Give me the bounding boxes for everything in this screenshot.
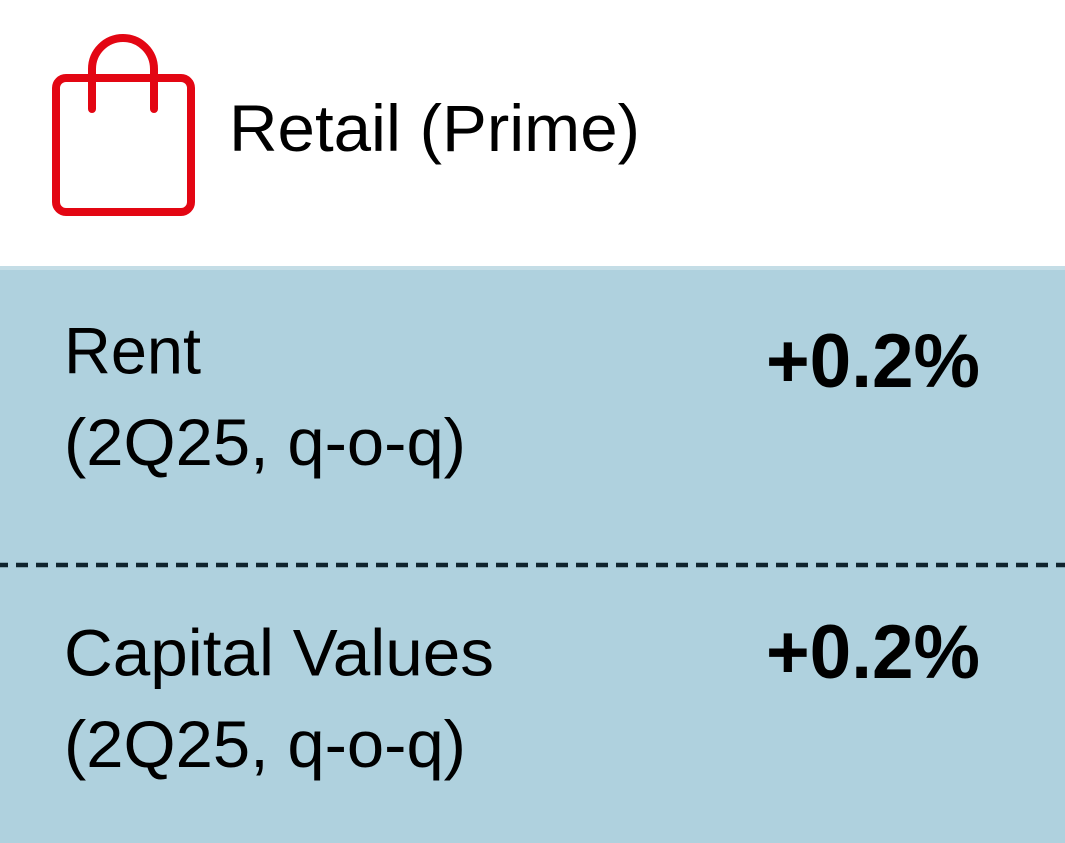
capital values period: (2Q25, q-o-q) (64, 707, 466, 781)
capital values label: Capital Values (64, 616, 494, 690)
icon: shopping bag (56, 38, 191, 212)
capital values row (64, 610, 980, 781)
rent row (64, 314, 980, 479)
panel: metrics (0, 266, 1065, 843)
rent label: Rent (64, 314, 201, 388)
rent period: (2Q25, q-o-q) (64, 405, 466, 479)
header: retail prime (56, 38, 640, 212)
rent value: +0.2% (766, 319, 980, 404)
capital values value: +0.2% (766, 610, 980, 695)
heading: Retail (Prime) (229, 91, 640, 165)
